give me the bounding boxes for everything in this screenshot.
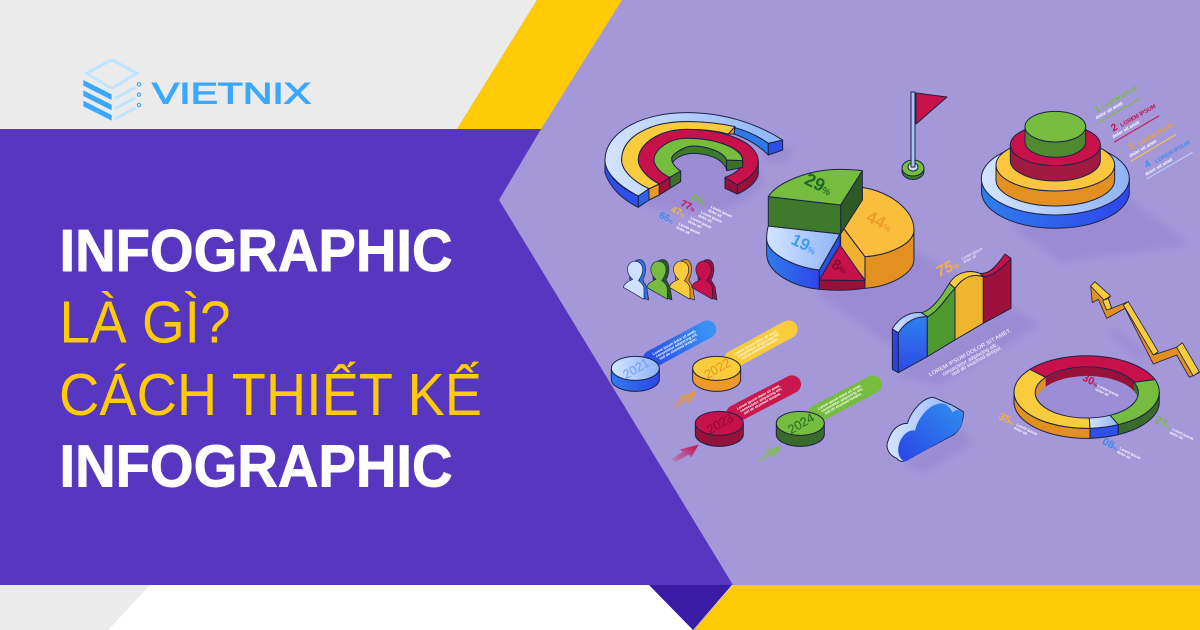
timeline: year pills <box>611 329 873 463</box>
timeline item: 2023: Lorem ipsum dolor sit amet, <box>736 384 781 411</box>
timeline item: 2022: sed do eiusmod tempor, <box>740 337 779 361</box>
arrow: green <box>755 446 782 463</box>
timeline item: 2022 <box>693 329 789 391</box>
icon: zigzag growth arrow <box>1091 282 1199 377</box>
legend item 4: 4 <box>1143 158 1153 171</box>
legend: arc chart percentages: 60% <box>689 192 708 209</box>
donut segment: yellow <box>1014 369 1090 428</box>
labels: donut percentages: 35% <box>997 411 1017 429</box>
icon: golf flag <box>902 92 947 180</box>
legend: cylinder labels <box>1093 85 1193 179</box>
arc inner blue wall <box>734 126 768 155</box>
legend: arc chart percentages: dolor sit <box>687 219 703 230</box>
legend item 4: LOREM IPSUM <box>1154 140 1192 165</box>
icon: four people <box>623 260 717 300</box>
chart: rainbow arc chart <box>605 113 783 207</box>
timeline item: 2023: 2023 <box>704 411 736 437</box>
legend: arc chart percentages <box>657 192 733 236</box>
timeline item: 2022: Lorem ipsum dolor sit amet, <box>734 329 778 356</box>
pie slice: 29% green: 29% <box>802 169 836 200</box>
legend item 2 <box>1109 103 1159 142</box>
legend item 4: dolor sit amet <box>1144 157 1174 177</box>
wave band: yellow <box>955 275 983 340</box>
pie slice: 44% yellow: 44% <box>864 207 896 236</box>
arc end cap <box>768 140 783 155</box>
cylinder tier: yellow <box>996 139 1115 206</box>
arc end faces <box>638 171 681 207</box>
panel: grey top-left corner <box>0 0 537 129</box>
wave band: green <box>927 288 955 357</box>
title <box>59 218 482 500</box>
icon: cloud <box>887 397 963 461</box>
title: INFOGRAPHIC <box>60 218 452 284</box>
arc: light blue band <box>605 113 783 196</box>
labels: wave chart: dolor sit <box>962 253 978 264</box>
labels: wave chart <box>928 246 1013 378</box>
arrow: orange <box>670 391 697 409</box>
labels: donut percentages: 27% <box>1153 414 1173 432</box>
cylinder tier: green <box>1025 111 1086 157</box>
panel: dark purple fold <box>649 585 732 630</box>
labels: wave chart: LOREM IPSUM DOLOR SIT AMET, <box>928 328 1013 378</box>
legend: arc chart percentages: dolor sit <box>676 225 691 236</box>
person: red <box>692 260 717 300</box>
labels: donut percentages: Lorem ipsum <box>1097 384 1120 398</box>
pie slice: 8% red: 8% <box>829 257 850 278</box>
labels: wave chart: consectetur adipiscing elit, <box>941 342 999 378</box>
title: CÁCH THIẾT KẾ <box>59 362 482 428</box>
logo wordmark: VIETNIX <box>152 78 311 110</box>
labels: donut percentages: Lorem ipsum <box>1119 447 1142 461</box>
legend item 2: LOREM IPSUM <box>1120 103 1157 129</box>
panel: yellow bottom stripe <box>694 585 1200 630</box>
legend item 1: dolor sit amet <box>1095 100 1124 120</box>
labels: donut percentages: 30% <box>1080 372 1101 390</box>
chart: wave area chart <box>892 254 1011 373</box>
labels: wave chart: Lorem ipsum <box>961 246 984 261</box>
person: blue <box>623 260 649 300</box>
panel: grey bottom-left corner <box>0 585 150 630</box>
panel: purple title arrow <box>0 129 733 585</box>
timeline item: 2022: 2022 <box>702 356 733 382</box>
panel: yellow top stripe <box>457 0 622 129</box>
arc outer side wall <box>605 160 638 207</box>
legend item 3: LOREM IPSUM <box>1137 122 1175 148</box>
legend: arc chart percentages: 47% <box>669 204 688 221</box>
wave band: red <box>983 258 1011 323</box>
pie slice: 19% light blue <box>767 226 840 289</box>
legend: arc chart percentages: Lorem ipsum <box>700 210 723 224</box>
labels: donut percentages: Lorem ipsum <box>1172 427 1195 441</box>
legend item 2: 2 <box>1109 122 1120 134</box>
labels: donut percentages: 08% <box>1100 436 1121 454</box>
cylinder tier: red <box>1010 124 1100 181</box>
wave band: blue <box>898 317 927 373</box>
donut outer wall <box>1014 392 1159 438</box>
pie slice: 8% red <box>819 245 865 290</box>
labels: donut percentages: Lorem ipsum <box>1016 423 1039 437</box>
arc: green band <box>672 146 727 170</box>
timeline item: 2021: 2021 <box>620 356 652 382</box>
labels: donut percentages: dolor sit <box>1095 387 1110 398</box>
legend item 3 <box>1127 122 1176 161</box>
legend item 3: 3 <box>1127 141 1137 153</box>
labels: donut percentages: dolor sit <box>1169 431 1184 441</box>
title: INFOGRAPHIC <box>60 434 452 500</box>
timeline item: 2024: Lorem ipsum dolor sit amet, <box>817 384 862 411</box>
arc: red band <box>638 129 758 185</box>
title: LÀ GÌ? <box>60 290 230 356</box>
legend: arc chart percentages: dolor sit <box>698 214 713 224</box>
wave left side <box>892 329 898 373</box>
chart: stacked cylinders <box>981 111 1129 228</box>
person: yellow <box>669 260 695 300</box>
labels: donut percentages <box>997 372 1195 461</box>
labels: donut percentages: dolor sit <box>1013 426 1028 436</box>
cylinder tier: blue <box>981 142 1129 228</box>
timeline item: 2022: consectetur adipiscing elit, <box>737 332 780 359</box>
donut segment: red <box>1030 356 1155 382</box>
timeline item: 2024: consectetur adipiscing elit, <box>821 387 864 413</box>
chart: 3D pie <box>767 169 914 290</box>
pie slice: 29% green <box>768 169 862 234</box>
legend item 4 <box>1143 140 1193 179</box>
timeline item: 2024: sed do eiusmod tempor, <box>824 392 863 416</box>
donut segment: light blue <box>1089 415 1118 428</box>
legend: arc chart percentages: Lorem ipsum <box>710 205 733 219</box>
logo: Vietnix <box>83 60 311 121</box>
legend item 1: LOREM IPSUM <box>1101 85 1139 111</box>
timeline item: 2023: consectetur adipiscing elit, <box>740 387 783 413</box>
donut hole and inner wall <box>1036 367 1138 418</box>
legend: arc chart percentages: 66% <box>657 210 676 227</box>
legend: arc chart percentages: 77% <box>679 198 698 215</box>
timeline item: 2021: consectetur adipiscing elit, <box>655 332 698 359</box>
cast shadows on the lavender plane <box>618 144 1190 473</box>
icon: server stack <box>83 60 141 121</box>
labels: wave chart: 75% <box>933 255 962 281</box>
timeline item: 2023 <box>695 384 792 446</box>
legend: arc chart percentages: Lorem ipsum <box>690 216 713 230</box>
legend item 2: dolor sit amet <box>1111 119 1141 139</box>
donut segment: green <box>1110 380 1159 425</box>
arrow: red <box>671 445 699 462</box>
legend: arc chart percentages: dolor sit <box>708 208 723 219</box>
legend item 1 <box>1093 85 1142 123</box>
labels: donut percentages: dolor sit <box>1116 450 1132 460</box>
person: green <box>647 260 672 300</box>
pie slice: 19% light blue: 19% <box>788 230 820 259</box>
legend item 3: dolor sit amet <box>1128 138 1158 158</box>
wave top surfaces <box>892 254 1011 333</box>
timeline item: 2024: 2024 <box>785 411 817 437</box>
timeline item: 2024 <box>776 384 873 446</box>
timeline item: 2021 <box>611 329 707 391</box>
legend: arc chart percentages: Lorem ipsum <box>678 222 701 236</box>
panel: white bottom strip <box>0 585 733 630</box>
arc: yellow band <box>622 122 735 189</box>
pie slice: 44% yellow <box>841 187 914 288</box>
chart: donut ring <box>1014 356 1159 438</box>
labels: wave chart: sed do eiusmod tempor. <box>951 345 1003 378</box>
timeline item: 2023: sed do eiusmod tempor, <box>743 392 782 416</box>
timeline item: 2021: sed do eiusmod tempor, <box>659 337 697 361</box>
timeline item: 2021: Lorem ipsum dolor sit amet, <box>652 329 697 356</box>
legend item 1: 1 <box>1093 103 1103 116</box>
